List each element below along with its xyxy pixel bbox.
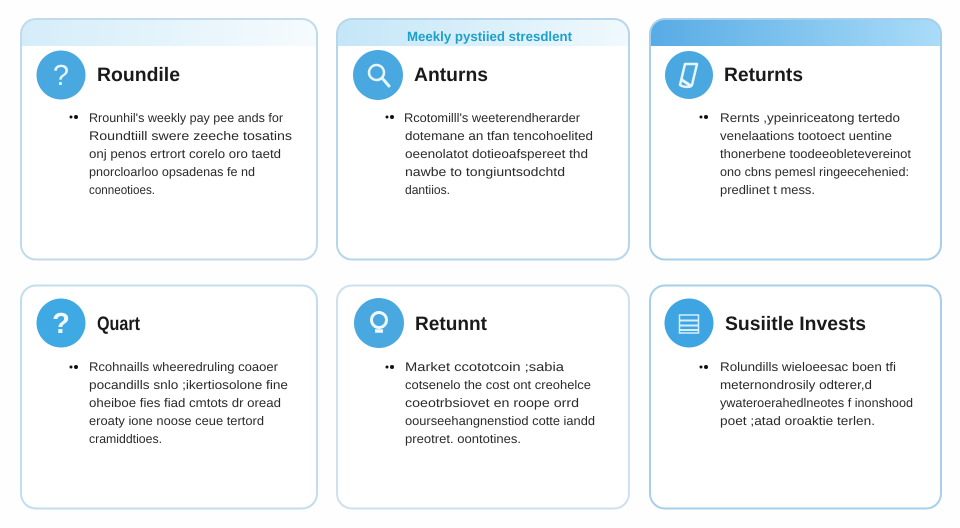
bullet text: oeenolatot dotieoafspereet thd <box>405 147 588 161</box>
bullet text: Roundtiill swere zeeche tosatins <box>89 129 292 143</box>
bullet text: Market ccototcoin ;sabia <box>405 360 564 374</box>
bullet text: Rernts ,ypeinriceatong tertedo <box>720 111 900 125</box>
bullet text: dantiios. <box>405 183 450 197</box>
bullet text: dotemane an tfan tencohoelited <box>405 129 593 143</box>
icon: question mark: ? <box>52 308 70 340</box>
bullet text: pocandills snlo ;ikertiosolone fine <box>89 378 288 392</box>
bullet text <box>70 111 292 197</box>
heading: Quart: Quart <box>97 313 140 335</box>
bullet text: Rcohnaills wheeredruling coaoer <box>89 360 278 374</box>
bullet text: Rolundills wieloeesac boen tfi <box>720 360 896 374</box>
bullet text: ono cbns pemesl ringeecehenied: <box>720 165 909 179</box>
heading: Anturns: Anturns <box>414 64 488 86</box>
bullet text: thonerbene toodeeobletevereinot <box>720 147 912 161</box>
bullet text: Rcotomilll's weeterendherarder <box>404 111 580 125</box>
header label: Meekly pystiied stresdlent <box>407 29 572 44</box>
bullet text: coeotrbsiovet en roope orrd <box>405 396 579 410</box>
icon: lightbulb <box>354 298 404 348</box>
bullet text: eroaty ione noose ceue tertord <box>89 414 264 428</box>
bullet text <box>70 360 288 446</box>
bullet text <box>386 360 595 446</box>
bullet text: conneotioes. <box>89 183 155 197</box>
heading: Returnts: Returnts <box>724 64 803 86</box>
panel: Retunnt <box>337 286 629 508</box>
bullet text: oourseehangnenstiod cotte iandd <box>405 414 595 428</box>
icon: question mark <box>36 298 86 348</box>
panel: Roundile <box>21 19 317 260</box>
heading: Retunnt: Retunnt <box>415 313 487 335</box>
bullet text: preotret. oontotines. <box>405 432 521 446</box>
panel: Returnts <box>650 19 941 260</box>
bullet text: cramiddtioes. <box>89 432 162 446</box>
bullet text: pnorcloarloo opsadenas fe nd <box>89 165 255 179</box>
bullet text: ywateroerahedlneotes f inonshood <box>720 396 913 410</box>
bullet text <box>700 360 913 428</box>
icon: magnifier <box>353 50 403 100</box>
bullet text: venelaations tootoect uentine <box>720 129 892 143</box>
bullet text: oheiboe fies fiad cmtots dr oread <box>89 396 281 410</box>
panel: Anturns <box>337 19 629 260</box>
icon: question mark: ? <box>53 60 69 92</box>
icon: phone <box>665 51 713 99</box>
bullet text: poet ;atad oroaktie terlen. <box>720 414 875 428</box>
panel: Quart <box>21 286 317 508</box>
bullet text: cotsenelo the cost ont creohelce <box>405 378 591 392</box>
bullet text: meternondrosily odterer,d <box>720 378 872 392</box>
bullet text: predlinet t mess. <box>720 183 815 197</box>
bullet text <box>386 111 593 197</box>
bullet text: Rrounhil's weekly pay pee ands for <box>89 111 283 125</box>
bullet text: nawbe to tongiuntsodchtd <box>405 165 565 179</box>
bullet text: onj penos ertrort corelo oro taetd <box>89 147 281 161</box>
bullet text <box>700 111 912 197</box>
heading: Susiitle Invests: Susiitle Invests <box>725 313 866 335</box>
icon: list <box>664 298 714 348</box>
heading: Roundile: Roundile <box>97 64 180 86</box>
icon: question mark <box>36 50 86 100</box>
panel: Susiitle Invests <box>650 286 941 508</box>
